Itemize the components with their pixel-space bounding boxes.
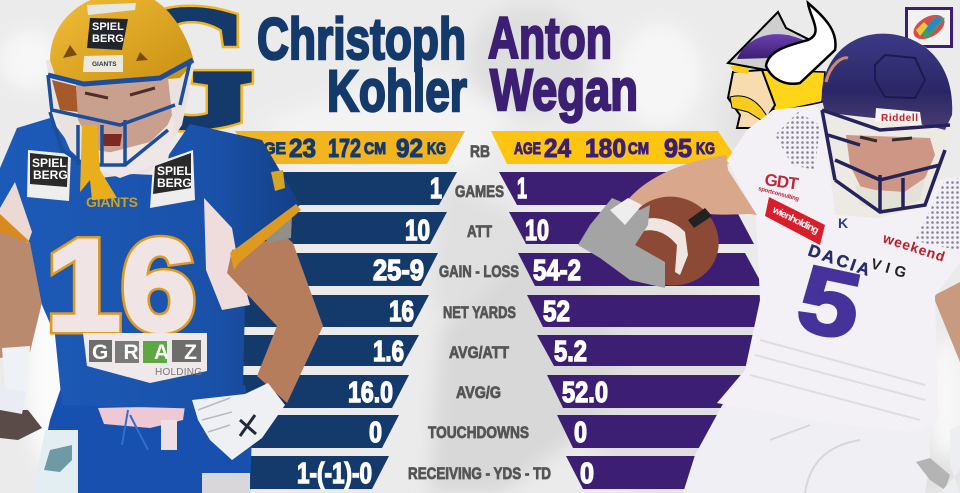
stat values: Wegan: 10 xyxy=(525,215,549,247)
player photo: Anton Wegan, Vikings xyxy=(578,34,960,493)
sponsor patches Spielberg: BERG xyxy=(157,176,192,190)
sponsor Weekend: weekend xyxy=(880,229,947,265)
sponsor patches Spielberg xyxy=(27,150,195,208)
jersey xyxy=(717,105,960,432)
stat values: Kohler: 1.6 xyxy=(373,336,404,368)
stat values: Wegan: 54-2 xyxy=(533,255,581,287)
banner: Kohler bio: 172 xyxy=(328,133,361,163)
banner: Wegan bio: CM xyxy=(628,139,649,158)
stat labels: GAIN - LOSS xyxy=(439,262,519,281)
Giants helmet xyxy=(46,0,195,200)
sponsor Kastner logo: K xyxy=(838,215,848,231)
stat values: Kohler: 10 xyxy=(405,215,430,247)
banner: Kohler bio: KG xyxy=(427,139,446,158)
jersey number 5: 5 xyxy=(789,245,870,360)
gold K logo xyxy=(271,170,285,191)
jersey wrinkles xyxy=(750,340,925,420)
stat values: Wegan: 52 xyxy=(543,296,570,328)
Giants helmet: SPIEL xyxy=(92,21,124,33)
far arm xyxy=(933,282,960,362)
label: RB position: RB xyxy=(470,142,490,161)
stat values: Wegan: 0 xyxy=(580,458,594,490)
sponsor patch GRAZ Holding xyxy=(83,333,207,383)
stat values: Kohler xyxy=(297,173,442,490)
stat labels: ATT xyxy=(467,222,492,241)
pants xyxy=(33,385,252,493)
sponsor GDT xyxy=(757,170,800,203)
sponsor patches Spielberg: SPIEL xyxy=(157,164,192,178)
jersey xyxy=(0,118,300,410)
sponsor GDT: GDT xyxy=(763,170,800,194)
stat values: Wegan: 5.2 xyxy=(554,336,587,368)
wristband xyxy=(610,198,642,225)
stat labels: TOUCHDOWNS xyxy=(428,423,529,442)
heading: Christoph Kohler xyxy=(257,7,467,124)
stat values: Kohler: 16 xyxy=(389,296,414,328)
stat values: Kohler: 25-9 xyxy=(373,255,424,287)
player photo: Christoph Kohler, Giants xyxy=(0,0,323,493)
jersey number 16: 16 xyxy=(46,212,196,358)
glove xyxy=(578,198,665,288)
stat labels: AVG/G xyxy=(456,383,501,402)
jersey side panels xyxy=(0,182,250,310)
jersey text Giants: GIANTS xyxy=(86,194,138,210)
banner: Kohler bio: 92 xyxy=(396,133,423,163)
sleeve band xyxy=(230,204,301,270)
right glove xyxy=(192,383,285,460)
football xyxy=(613,184,731,298)
badge: international football xyxy=(906,8,952,46)
sponsor Dacia: DACIA xyxy=(806,241,872,280)
sponsor GDT: sportconsulting xyxy=(757,186,800,203)
right arm xyxy=(227,236,323,403)
stat values: Kohler: 1 xyxy=(430,173,442,205)
sponsor Wienholding: wienholding xyxy=(770,204,820,237)
stat labels: GAMES xyxy=(455,182,504,201)
banner: Wegan bio: 95 xyxy=(664,133,692,163)
stat labels: NET YARDS xyxy=(443,303,516,322)
jersey number 16: 16 xyxy=(46,212,196,358)
Giants helmet: GIANTS xyxy=(92,61,117,68)
stat values: Wegan: 0 xyxy=(574,417,587,449)
banner: Wegan bio: 180 xyxy=(585,133,626,163)
helmet xyxy=(728,12,810,72)
sponsor VIG: VIG xyxy=(869,256,908,282)
stat values: Wegan: 1 xyxy=(517,173,527,205)
lower right glove xyxy=(916,458,950,490)
left arm and glove xyxy=(0,225,45,440)
bars: Wegan stats xyxy=(499,172,763,489)
sponsor patch GRAZ Holding: HOLDING xyxy=(155,367,202,378)
back arm xyxy=(625,155,757,225)
stat labels: RECEIVING - YDS - TD xyxy=(408,464,551,483)
heading: Anton Wegan: Wegan xyxy=(490,58,638,123)
banner: Wegan bio: AGE xyxy=(514,139,541,158)
bars: Kohler stats xyxy=(240,172,457,489)
heading: Christoph Kohler: Christoph xyxy=(257,7,466,72)
stat values: Wegan xyxy=(517,173,608,490)
leg shading xyxy=(770,425,860,493)
stat labels: AVG/ATT xyxy=(449,343,510,362)
sponsor patch GRAZ Holding: GRAZ xyxy=(92,341,197,364)
heading: Anton Wegan: Anton xyxy=(488,6,612,71)
heading: Anton Wegan xyxy=(488,6,638,123)
Giants helmet: BERG xyxy=(92,33,124,45)
sponsor Wienholding xyxy=(765,197,825,245)
banner: Wegan bio: KG xyxy=(696,139,715,158)
heading: Christoph Kohler: Kohler xyxy=(327,59,467,124)
horn xyxy=(766,3,836,84)
sponsor patches Spielberg: SPIEL xyxy=(32,156,67,170)
lower right wrist xyxy=(940,425,960,493)
banner: Wegan bio xyxy=(491,131,740,164)
pants xyxy=(683,400,930,493)
hair xyxy=(758,70,825,112)
Wegan helmet: Riddell xyxy=(881,113,918,124)
banner: Kohler bio: 23 xyxy=(289,133,316,163)
stat labels xyxy=(408,182,551,483)
banner: Wegan bio: 24 xyxy=(544,133,572,163)
banner: Kohler bio: CM xyxy=(364,139,386,158)
Vikings logo xyxy=(728,3,836,128)
Wegan helmet xyxy=(822,34,952,218)
stat values: Kohler: 0 xyxy=(369,417,382,449)
sponsor patches Spielberg: BERG xyxy=(33,168,68,182)
stat values: Kohler: 16.0 xyxy=(348,377,393,409)
stat values: Wegan: 52.0 xyxy=(562,377,608,409)
stat values: Kohler: 1-(-1)-0 xyxy=(297,458,372,490)
mesh panels xyxy=(775,112,960,250)
banner: Kohler bio xyxy=(235,131,465,164)
banner: Kohler bio: AGE xyxy=(252,139,286,158)
face and beard xyxy=(728,66,775,128)
